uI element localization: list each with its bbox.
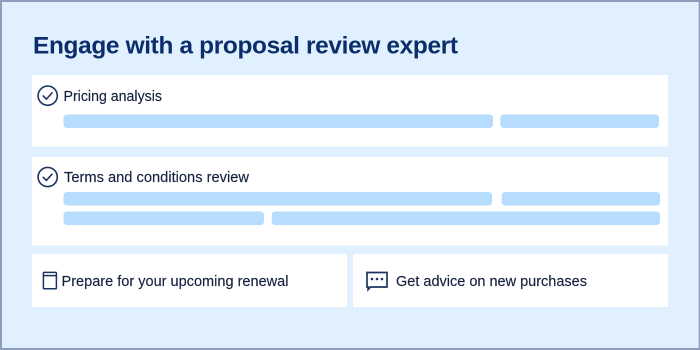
panel: advice on purchases — [353, 254, 668, 307]
label: prepare for renewal: Prepare for your upcoming renewal — [62, 273, 288, 290]
icon: check circle — [38, 167, 57, 187]
icon: check circle — [38, 86, 57, 105]
panel: prepare for renewal — [32, 254, 347, 307]
panel: pricing analysis — [32, 75, 668, 146]
placeholder bars — [64, 192, 660, 225]
placeholder bars — [64, 114, 659, 128]
title: Engage with a proposal review expert — [33, 32, 458, 60]
panel: terms and conditions review — [32, 157, 668, 246]
icon: book — [43, 272, 56, 289]
label: pricing analysis: Pricing analysis — [64, 88, 162, 105]
label: terms and conditions review: Terms and conditions review — [64, 169, 249, 186]
label: advice on purchases: Get advice on new purchases — [396, 273, 587, 290]
icon: speech bubble — [367, 272, 387, 290]
